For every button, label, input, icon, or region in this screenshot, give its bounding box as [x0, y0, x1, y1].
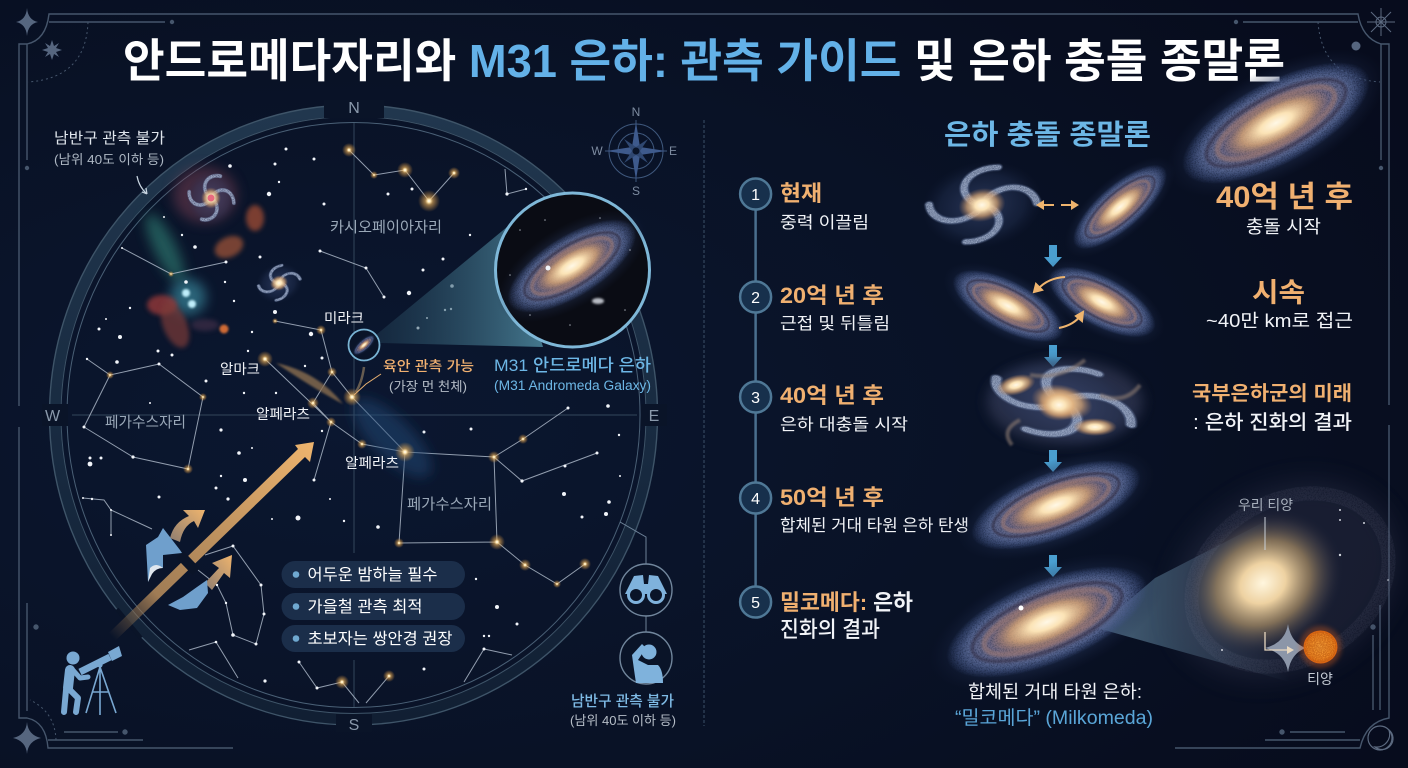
step 5: 진화의 결과: [780, 617, 880, 642]
step 1: 현재: [780, 181, 822, 206]
tip 1: [282, 561, 465, 588]
galaxy: zoomed elliptical: [1135, 440, 1408, 720]
blue shape lower: [168, 580, 208, 610]
label: Milkomeda caption: 합체된 거대 타원 은하:: [968, 682, 1142, 702]
tip 2: [282, 593, 465, 620]
label: Milkomeda caption: [955, 682, 1153, 729]
corner icon: top-left small star: [42, 40, 62, 60]
corner icon: bottom-right moon: [1368, 726, 1393, 750]
icon column: binoculars and observer: [570, 522, 676, 728]
panel: galaxy collision: [740, 19, 1408, 729]
step 3: 40억 년 후: [780, 383, 884, 408]
M31 small marker: [348, 330, 380, 360]
callout: naked eye: (가장 먼 천체): [389, 379, 467, 394]
label: Alpheratz upper: 알페라츠: [256, 406, 310, 422]
galaxy: step 5 Milkomeda: [912, 525, 1182, 719]
big arrow: [108, 442, 314, 641]
blue crescent highlight: [148, 565, 163, 582]
label: M31 name: (M31 Andromeda Galaxy): [494, 378, 651, 393]
compass rose: S: [632, 184, 640, 198]
observer person: [64, 652, 88, 712]
callout: southern hemisphere bottom: 남반구 관측 불가: [571, 693, 674, 710]
callout: naked eye: [354, 358, 474, 395]
galaxy: top-right Andromeda: [1144, 19, 1408, 227]
arrow: step 3 to 4: [1044, 450, 1062, 472]
right column: speed stat: ~40만 km로 접근: [1206, 311, 1353, 331]
step 2: 20억 년 후: [780, 283, 884, 308]
compass rose: [591, 105, 677, 198]
galaxy: step 2 right: [1026, 241, 1178, 363]
label: Pegasus left: 페가수스자리: [105, 414, 186, 431]
step 2: 2: [751, 290, 760, 307]
right column: year stat: [1216, 181, 1353, 237]
right column: year stat: 40억 년 후: [1216, 181, 1353, 214]
telescope: [80, 646, 122, 715]
label: Alpheratz lower: 알페라츠: [345, 455, 399, 471]
corner icon: top-right small star: [1352, 42, 1360, 50]
galaxy: step 1 Andromeda: [1049, 140, 1191, 274]
callout: southern hemisphere top: [54, 130, 165, 194]
step 1: 1: [751, 187, 760, 204]
icon: telescope observer: [64, 646, 122, 715]
tip 2: 가을철 관측 최적: [308, 598, 422, 616]
ring compass gaps: [42, 100, 667, 732]
arrows: rotation: [1034, 277, 1083, 328]
compass rose: W: [591, 144, 603, 158]
right column: local group: : 은하 진화의 결과: [1193, 411, 1352, 434]
galaxy: Milkomeda stars: [1018, 606, 1024, 610]
step 1: [740, 178, 869, 232]
small arrow lower: [205, 555, 232, 590]
step 5: 밀코메다: 은하: [780, 590, 913, 615]
arrow gap: [176, 551, 200, 575]
step 2: 근접 및 뒤틀림: [780, 314, 890, 333]
bright stars: [106, 143, 591, 689]
tip 3: [282, 625, 465, 652]
step 3: [740, 382, 908, 434]
corner icon: bottom-left star: [13, 722, 41, 754]
step 1: 중력 이끌림: [780, 213, 869, 232]
constellation lines: [83, 150, 597, 703]
label: Almak: 알마크: [220, 361, 260, 377]
star map ring: [50, 105, 658, 725]
milky glow band: [341, 387, 443, 489]
step 5: 5: [751, 595, 760, 612]
nebula region: [138, 167, 308, 352]
arrows: approaching: [1036, 200, 1079, 210]
step 3: 3: [751, 390, 760, 407]
step 3: 은하 대충돌 시작: [780, 415, 908, 434]
step 4: 4: [751, 491, 760, 508]
callout: naked eye: 육안 관측 가능: [383, 358, 474, 374]
label: Milkomeda caption: “밀코메다” (Milkomeda): [955, 707, 1153, 729]
corner icon: top-left star: [16, 8, 38, 36]
M31 inset photo: [479, 187, 665, 347]
label: Mirach: 미라크: [324, 310, 364, 326]
map directions: S: [349, 717, 359, 734]
right column: local group: [1192, 382, 1352, 434]
blue shape upper: [146, 528, 182, 582]
map directions: N: [348, 100, 360, 117]
galaxy: step 1 spiral: [915, 152, 1049, 258]
label: sun: 티양: [1307, 671, 1333, 687]
right column: speed stat: 시속: [1252, 278, 1305, 308]
arrow: step 2 to 3: [1044, 345, 1062, 367]
label: M31 name: M31 안드로메다 은하: [494, 356, 651, 375]
step 4: 합체된 거대 타원 은하 탄생: [780, 516, 969, 535]
heading: collision: 은하 충돌 종말론: [944, 119, 1151, 150]
step 5: [740, 586, 913, 642]
zoom cone to M31: [376, 227, 543, 347]
map directions: E: [649, 408, 659, 425]
icon: binoculars: [620, 564, 672, 616]
callout: southern hemisphere top: (남위 40도 이하 등): [54, 152, 164, 167]
label: our sun top: 우리 티양: [1238, 497, 1293, 513]
callout: southern hemisphere top: 남반구 관측 불가: [54, 130, 165, 147]
timeline line: [754, 194, 757, 602]
icon: person with hand to brow: [620, 632, 672, 684]
step 4: 50억 년 후: [780, 485, 884, 510]
corner icon: top-right sun: [1367, 8, 1395, 36]
panel: star map: [42, 100, 667, 734]
small arrow upper: [170, 510, 205, 542]
tips list: [282, 561, 465, 652]
swoosh near naked-eye label: [356, 367, 364, 392]
callout: southern hemisphere bottom: (남위 40도 이하 등): [570, 713, 676, 728]
callout: southern hemisphere bottom: [570, 693, 676, 728]
galaxy: step 4 merged: [943, 427, 1169, 583]
pointer to sun: [1265, 624, 1306, 672]
title: 안드로메다자리와 M31 은하: 관측 가이드 및 은하 충돌 종말론: [123, 35, 1285, 87]
compass rose: E: [669, 144, 677, 158]
zoom cone: Milkomeda: [1097, 520, 1290, 682]
label: our sun top: [1238, 497, 1293, 550]
right column: speed stat: [1206, 278, 1353, 331]
label: Cassiopeia: 카시오페이아자리: [330, 219, 442, 236]
label: M31 name: [494, 356, 651, 393]
right column: local group: 국부은하군의 미래: [1192, 382, 1352, 405]
divider: [703, 120, 705, 726]
map directions: W: [45, 408, 61, 425]
icon: sun: [1300, 626, 1342, 668]
map directions: [45, 100, 659, 734]
step 2: [740, 282, 890, 333]
arrow: step 1 to 2: [1044, 245, 1062, 267]
galaxy: step 2 left: [930, 244, 1086, 368]
swoosh near Almak: [276, 363, 343, 404]
tip 3: 초보자는 쌍안경 권장: [308, 630, 453, 648]
step 4: [740, 482, 969, 535]
right column: year stat: 충돌 시작: [1246, 217, 1321, 237]
galaxy: step 3 colliding: [974, 342, 1150, 462]
observing arrows: [108, 442, 314, 641]
compass rose: N: [632, 105, 640, 119]
arrow: step 4 to 5: [1044, 555, 1062, 577]
label: Pegasus right: 페가수스자리: [407, 496, 492, 513]
background stars: [82, 148, 621, 690]
tip 1: 어두운 밤하늘 필수: [308, 566, 438, 584]
